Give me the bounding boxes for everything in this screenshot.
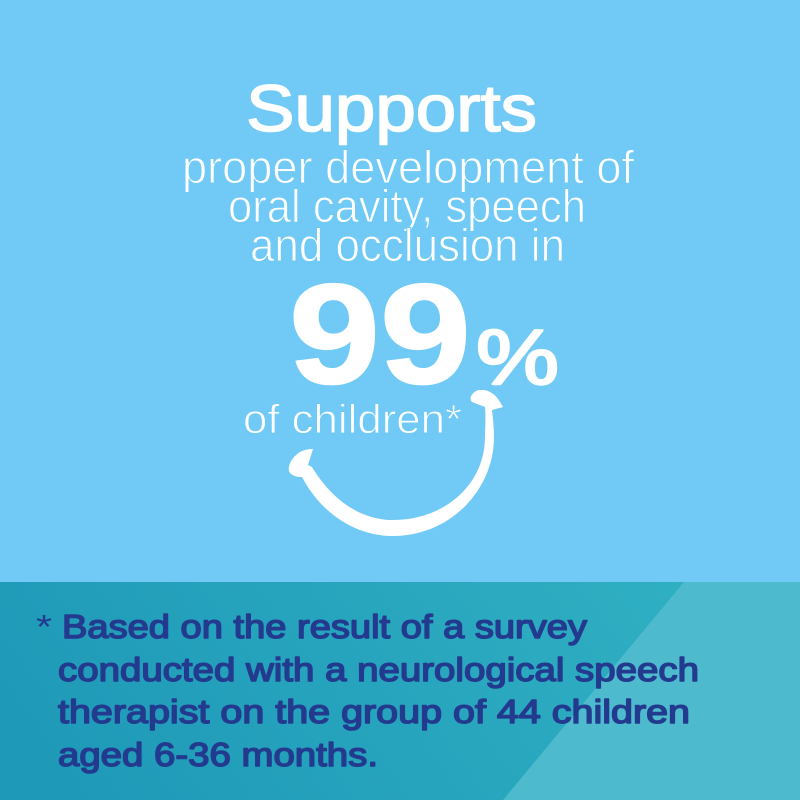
text block: footnote: aged 6-36 months. [58, 736, 378, 773]
text block: description: oral cavity, speech [228, 180, 586, 232]
text block: description: and occlusion in [250, 219, 565, 271]
panel: footnote band [0, 582, 800, 800]
text block: description: proper development of [182, 141, 634, 193]
statistic: 99%: % [476, 313, 559, 401]
text block: footnote: conducted with a neurological speech [58, 651, 699, 688]
statistic: 99% [289, 255, 559, 414]
statistic: 99%: 99 [289, 255, 471, 414]
text block: footnote [36, 608, 699, 773]
text: of children: of children* [243, 396, 462, 442]
text block: footnote: * [36, 608, 52, 645]
icon: smile arc [289, 390, 503, 536]
text block: footnote: Based on the result of a survey [62, 608, 588, 645]
heading: Supports: Supports [246, 71, 537, 145]
text block: description [182, 141, 634, 271]
text block: footnote: therapist on the group of 44 children [58, 693, 690, 730]
